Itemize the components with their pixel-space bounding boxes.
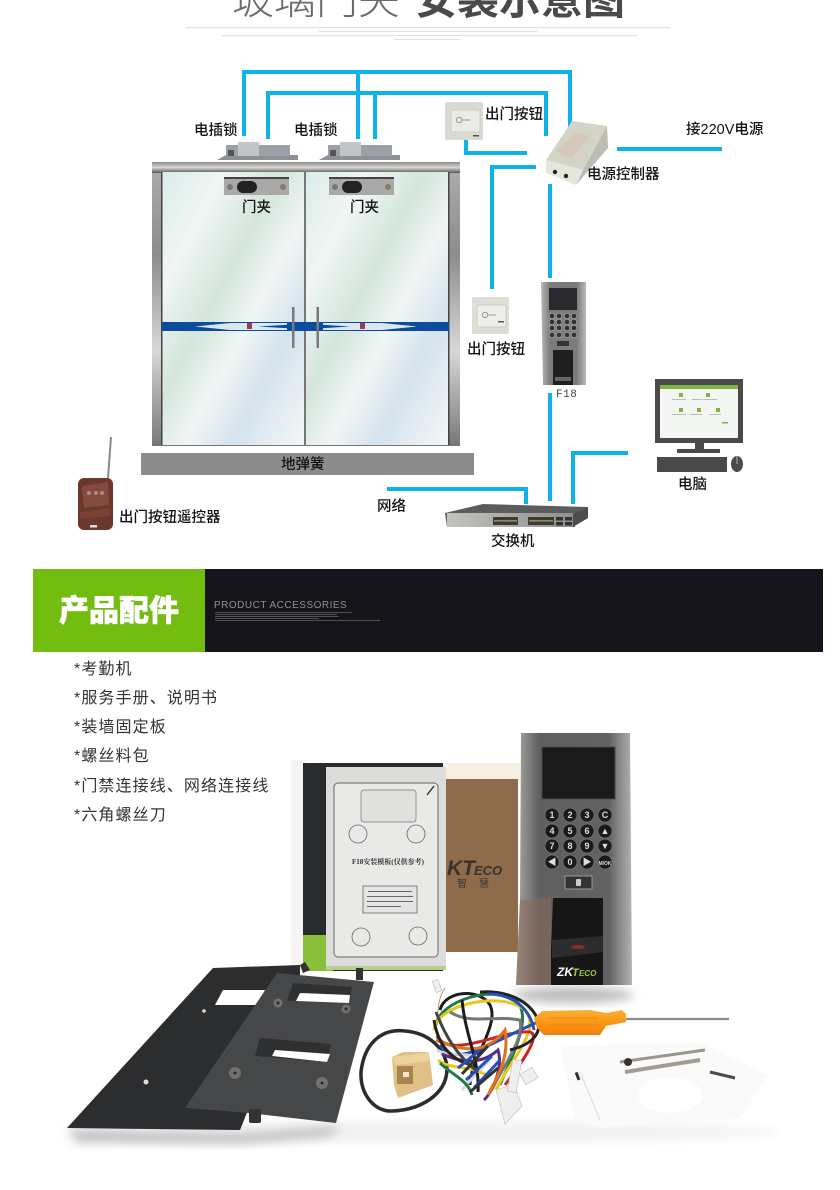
terminal logo: T — [572, 967, 580, 979]
photo: screwdriver — [534, 1010, 729, 1035]
icon: exit button top — [445, 102, 483, 140]
title — [232, 0, 625, 23]
banner dark strip — [205, 569, 823, 652]
icon: power controller — [546, 121, 608, 185]
accessories list — [74, 660, 269, 824]
door clamp right — [329, 177, 394, 195]
photo: F18 terminal: 2 — [567, 810, 573, 820]
floor spring bar — [141, 453, 474, 475]
accessories list: *门禁连接线、网络连接线 — [74, 776, 269, 795]
electric lock left — [217, 142, 298, 160]
photo: brown packaging box: KT — [447, 857, 477, 880]
photo: F18 terminal: 5 — [567, 826, 573, 836]
photo: F18 terminal: 3 — [584, 810, 590, 820]
photo: F18 terminal: M/OK — [598, 861, 612, 867]
label: exit button: 出门按钮 — [467, 340, 525, 358]
accessories list: *螺丝料包 — [74, 747, 150, 765]
banner green tab — [33, 569, 205, 652]
photo: F18 terminal: 9 — [584, 841, 590, 851]
label: switch: 交换机 — [491, 532, 535, 550]
label: power controller: 电源控制器 — [587, 166, 660, 183]
label: exit button: 出门按钮 — [485, 105, 543, 123]
accessories list: *考勤机 — [74, 660, 133, 678]
door handles — [292, 307, 319, 348]
panel: glass double door — [152, 162, 460, 446]
bracket shadow — [70, 1126, 340, 1144]
terminal logo: ECO — [579, 969, 597, 978]
banner dark strip: PRODUCT ACCESSORIES — [214, 600, 347, 611]
icon: remote control — [78, 437, 113, 530]
photo: F18 terminal: ▲ — [601, 826, 609, 836]
label: electric lock: 电插锁 — [294, 122, 338, 139]
label: network: 网络 — [377, 497, 406, 515]
wire connectors — [432, 979, 538, 1124]
banner green tab: 产品配件 — [59, 595, 179, 628]
photo backdrop — [60, 760, 780, 1142]
front plate — [185, 973, 374, 1123]
photo: F18 terminal: 0 — [567, 857, 573, 867]
photo: manual dark cover — [303, 763, 443, 971]
back plate — [67, 965, 300, 1130]
photo: F18 terminal: C — [602, 810, 609, 820]
photo: installation template: F18安装模板(仅供参考) — [352, 857, 425, 866]
photo: F18 terminal — [513, 733, 633, 1003]
accessories list: *装墙固定板 — [74, 718, 167, 736]
photo: F18 terminal: 1 — [549, 810, 555, 820]
label: door clamp: 门夹 — [242, 199, 271, 216]
photo: network cable and coupler — [361, 1031, 447, 1111]
icon: network switch — [445, 504, 588, 527]
floor spring bar: 地弹簧 — [281, 455, 324, 473]
icon: F18 device small — [541, 282, 586, 385]
label: F18: F18 — [556, 389, 577, 401]
photo: brown packaging box — [446, 779, 518, 952]
wiring diagram lines — [244, 72, 722, 504]
photo: F18 terminal: 6 — [584, 826, 590, 836]
photo: F18 terminal: 7 — [549, 841, 555, 851]
photo: screw bag — [560, 1043, 768, 1128]
icon: computer — [655, 379, 743, 472]
accessories list: *六角螺丝刀 — [74, 806, 167, 824]
photo: F18 terminal: ▼ — [601, 841, 609, 851]
label: remote: 出门按钮遥控器 — [119, 508, 221, 526]
photo: installation template — [326, 767, 446, 970]
subtitle fine print — [185, 27, 671, 40]
photo: F18 terminal: ▶ — [582, 857, 592, 867]
photo: F18 terminal: 4 — [549, 826, 555, 836]
icon: exit button middle — [472, 297, 509, 334]
section banner — [33, 569, 823, 652]
photo: wall mounting bracket — [67, 962, 374, 1144]
door clamp left — [224, 177, 289, 195]
label: 220V supply: 接220V电源 — [686, 121, 764, 138]
electric lock right — [319, 142, 400, 160]
label: electric lock: 电插锁 — [194, 122, 238, 139]
photo: brown packaging box: 智慧 — [457, 877, 501, 890]
door decorative blue band — [162, 322, 449, 331]
accessories list: *服务手册、说明书 — [74, 689, 218, 707]
label: door clamp: 门夹 — [350, 199, 379, 216]
terminal logo — [556, 965, 597, 979]
terminal logo: ZK — [556, 965, 574, 979]
photo: F18 terminal: ◀ — [547, 857, 557, 867]
label: computer: 电脑 — [678, 476, 707, 493]
photo: wiring harness — [432, 979, 539, 1124]
photo: brown packaging box: ECO — [474, 863, 502, 878]
photo: F18 terminal: 8 — [567, 841, 573, 851]
